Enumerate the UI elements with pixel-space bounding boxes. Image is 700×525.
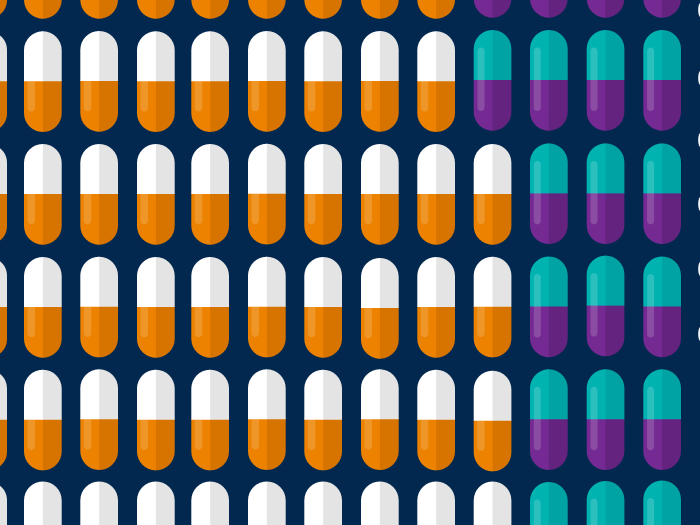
- orange capsule row 3: [0, 144, 511, 245]
- orange capsule row 1 (cropped at top): [0, 0, 455, 19]
- orange capsule row 4: [0, 257, 511, 359]
- teal capsule row 4: [530, 256, 681, 357]
- white capsule row 6 (cropped at bottom): [0, 482, 511, 525]
- orange capsule row 5: [0, 369, 511, 471]
- teal capsule row 3: [530, 143, 681, 244]
- teal capsule row 5: [530, 369, 681, 470]
- teal capsule row 2: [474, 30, 681, 131]
- purple capsule row 1 (cropped at top): [474, 0, 681, 18]
- orange capsule row 2: [0, 31, 455, 132]
- teal capsule row 6 (cropped at bottom): [530, 480, 681, 525]
- orange and white capsules: [0, 0, 511, 525]
- teal and purple capsules: [474, 0, 681, 525]
- white dots cropped at right edge: [698, 3, 700, 341]
